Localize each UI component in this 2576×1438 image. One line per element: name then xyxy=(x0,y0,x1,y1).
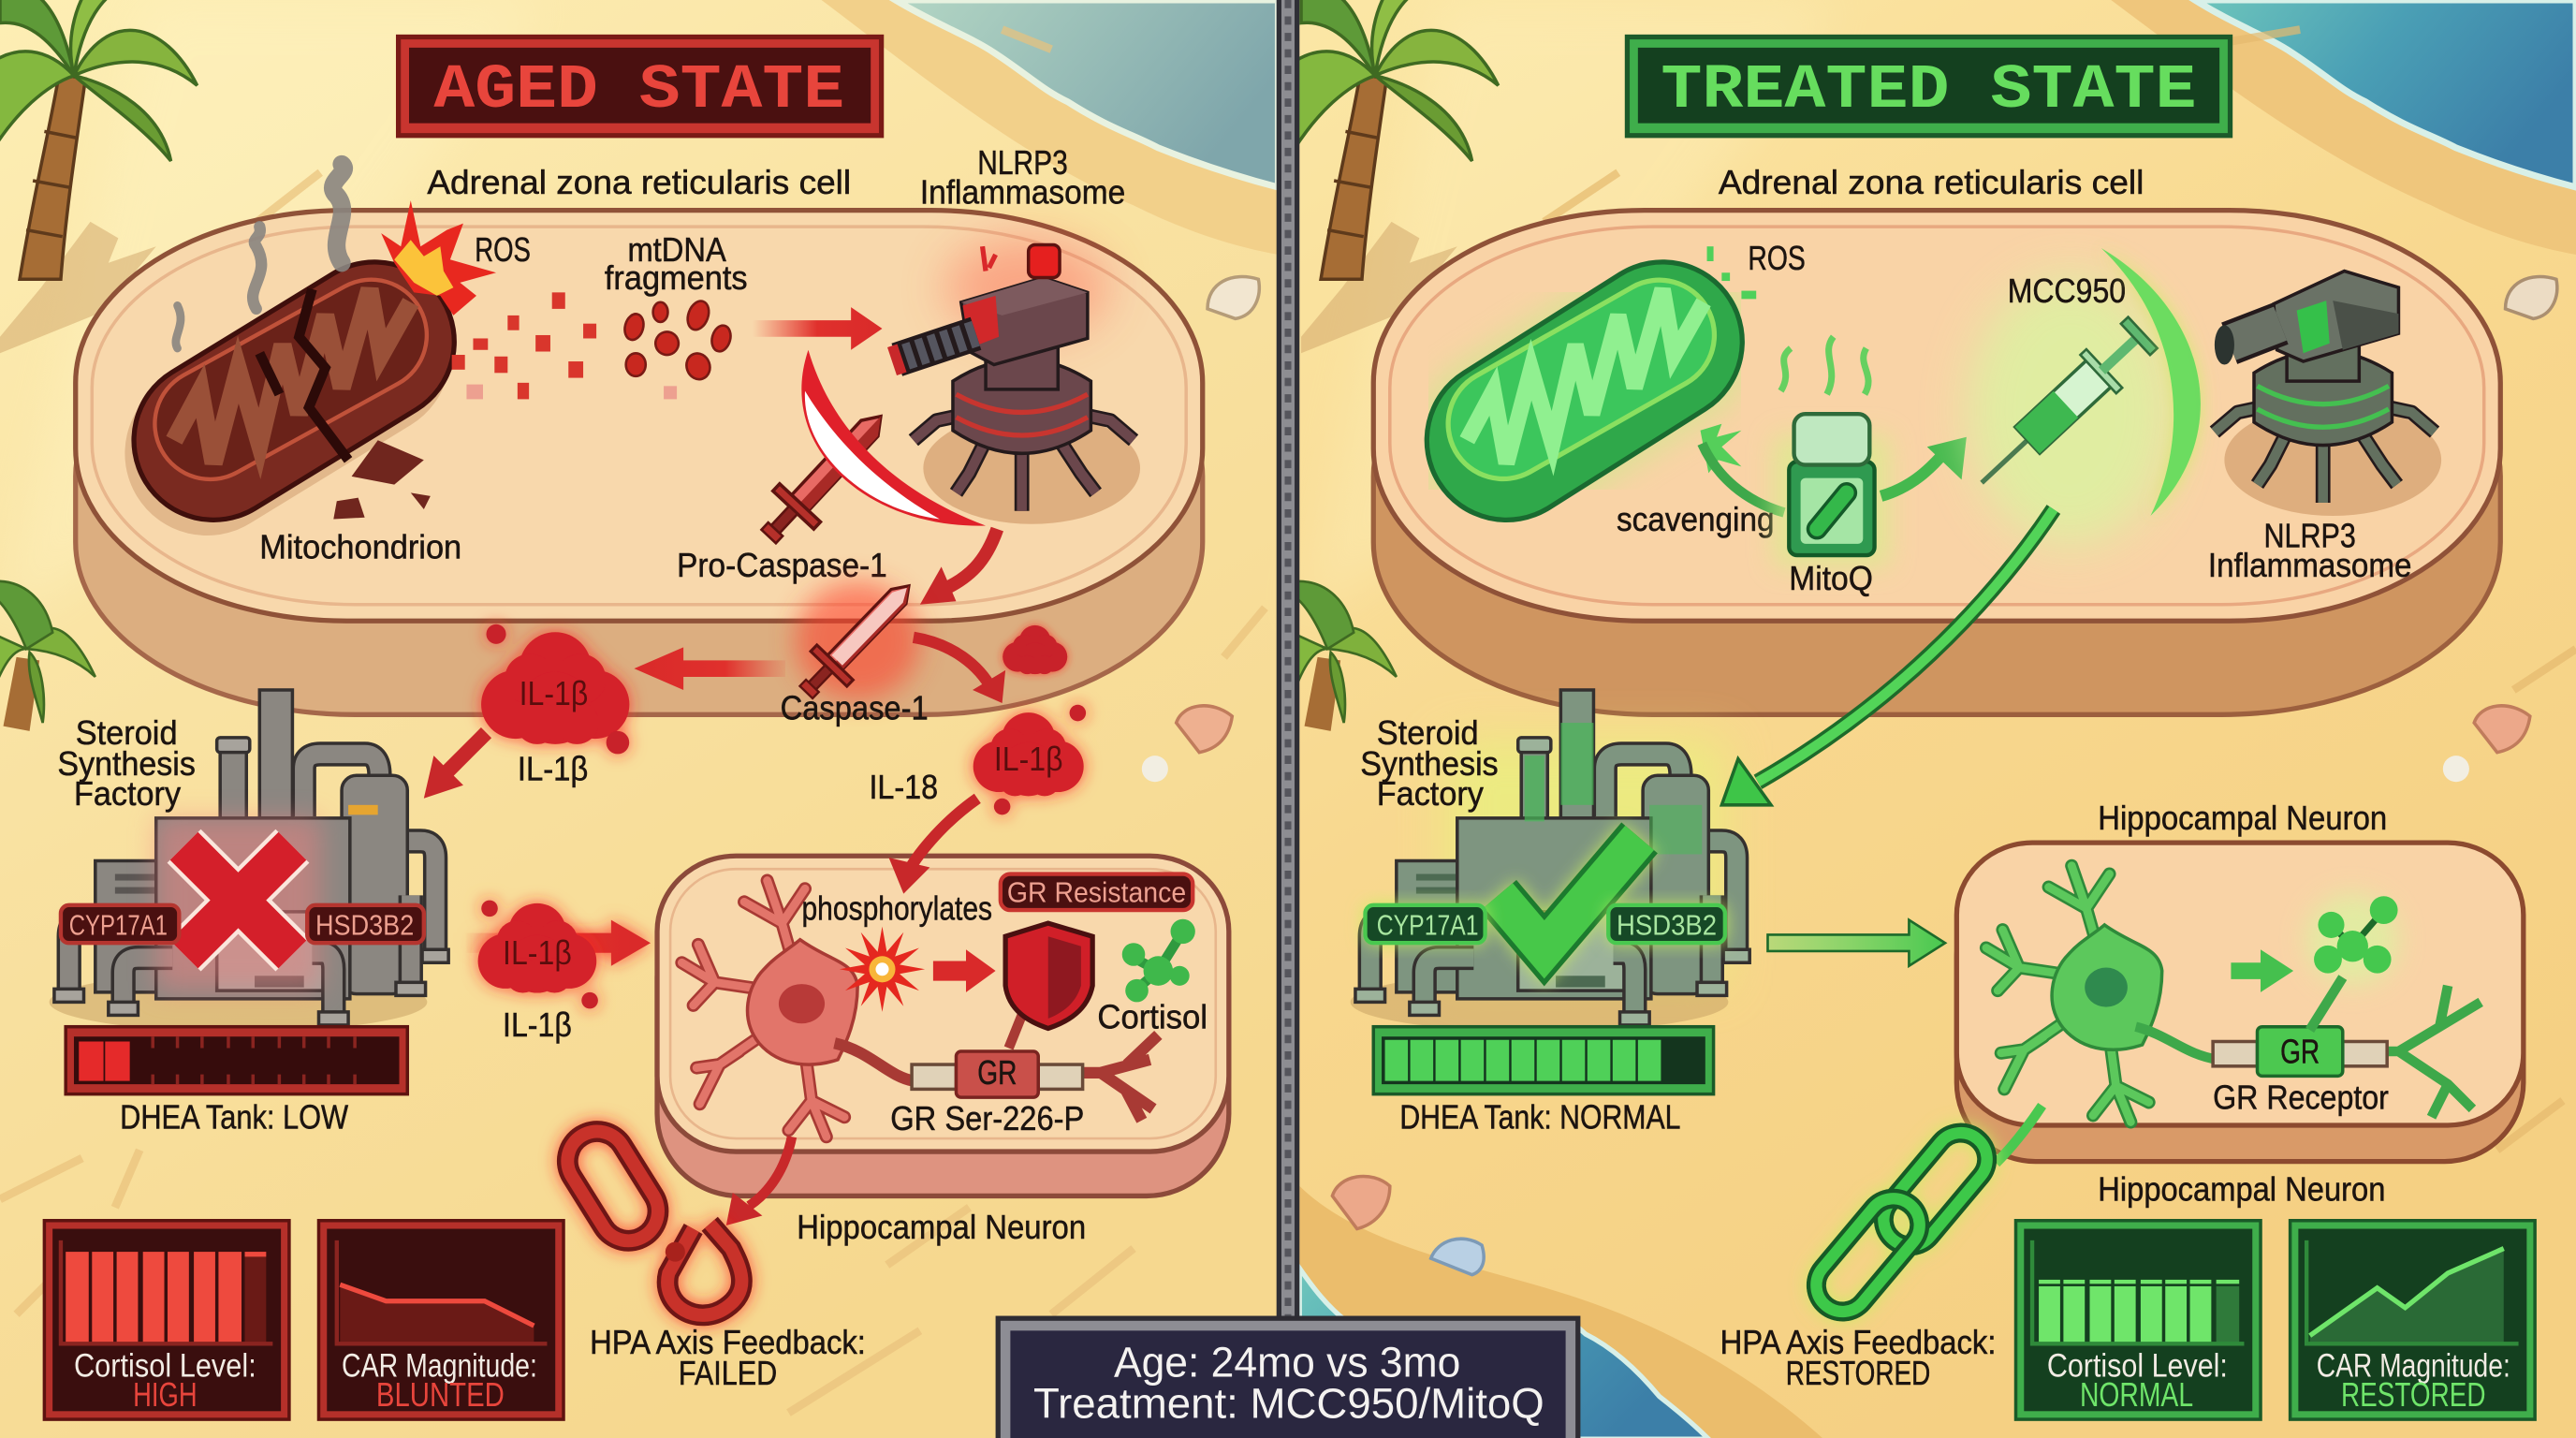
green check xyxy=(1499,838,1640,949)
label: NLRP3 treated xyxy=(2208,516,2411,584)
label: steroid factory aged: Steroid xyxy=(76,713,178,752)
bar chart: cortisol normal xyxy=(2039,1280,2239,1343)
panel: cortisol level high: HIGH xyxy=(133,1375,198,1414)
panel: treated state background xyxy=(1298,0,2576,1438)
healthy mitochondrion xyxy=(1467,289,1704,463)
steroid factory aged xyxy=(50,690,448,1032)
MCC950 syringe xyxy=(1964,314,2160,502)
enzyme tag: HSD3B2 aged: HSD3B2 xyxy=(315,908,414,941)
palm tree: treated lower xyxy=(1292,581,1397,731)
label: hippocampal neuron lower: Hippocampal Neuron xyxy=(2098,1170,2385,1209)
MitoQ vapour xyxy=(1781,337,1868,394)
panel: hippocampal neuron aged xyxy=(657,856,1229,1196)
label: HPA feedback restored: HPA Axis Feedback: xyxy=(1720,1323,1996,1361)
neuron connector and GR aged xyxy=(912,1051,1083,1097)
label: IL-18: IL-18 xyxy=(869,768,938,806)
arrow: IL-1β to neuron xyxy=(465,920,651,966)
label: adrenal cell treated: Adrenal zona reticularis cell xyxy=(1719,163,2144,201)
label: ROS treated: ROS xyxy=(1748,239,1806,277)
label: cortisol: Cortisol xyxy=(1097,997,1208,1035)
label: GR receptor: GR Receptor xyxy=(2213,1078,2389,1116)
nucleus treated xyxy=(2085,968,2128,1007)
cortisol molecule aged xyxy=(1122,919,1195,1002)
cytokine blob: upper IL-1β: IL-1β xyxy=(520,674,588,712)
arrow: IL-1β to factory xyxy=(444,733,487,775)
panel: cortisol level normal: NORMAL xyxy=(2080,1375,2193,1414)
nucleus aged xyxy=(779,984,825,1023)
panel: CAR magnitude restored: CAR Magnitude: xyxy=(2317,1347,2510,1384)
arrow head caspase-1 to IL-18 xyxy=(973,670,1005,703)
arrow: caspase-1 to IL-18 xyxy=(914,638,992,690)
restored chain xyxy=(1806,1123,1998,1322)
arrow: neuron to cortisol treated xyxy=(2231,949,2293,992)
gun barrel xyxy=(897,333,976,360)
turret head xyxy=(961,278,1088,365)
shells: aged xyxy=(1142,277,1259,782)
label: hippocampal neuron top: Hippocampal Neuron xyxy=(2098,799,2387,837)
shore: wet sand right bottom xyxy=(1299,1186,1823,1438)
pro-caspase-1 sword xyxy=(748,397,901,555)
enzyme tag: CYP17A1 aged: CYP17A1 xyxy=(69,908,168,941)
neuron treated xyxy=(1986,866,2162,1122)
shore: wet sand left xyxy=(822,0,1278,255)
label: steroid factory aged xyxy=(57,713,196,813)
panel: treated adrenal cell xyxy=(1373,211,2500,714)
label: IL-1β below blob: IL-1β xyxy=(518,749,588,787)
panel: CAR magnitude restored xyxy=(2289,1219,2537,1421)
small cytokine blob xyxy=(1003,625,1067,674)
decoration: light rays right xyxy=(1299,0,1840,624)
label: NLRP3 aged: Inflammasome xyxy=(920,173,1125,212)
cytokine blob: lower IL-1β: IL-1β xyxy=(503,933,572,972)
cytokine blob: right IL-1β: IL-1β xyxy=(994,740,1063,778)
palm tree: treated top xyxy=(1293,0,1499,353)
red beacon xyxy=(1029,244,1060,278)
sand streaks right xyxy=(1528,30,2576,1150)
label: HPA feedback restored: RESTORED xyxy=(1786,1354,1930,1392)
panel: cortisol level high: Cortisol Level: xyxy=(74,1347,256,1384)
palm tree: aged lower xyxy=(0,581,95,731)
panel: cortisol level high xyxy=(43,1219,291,1421)
label: steroid factory treated: Synthesis xyxy=(1360,744,1499,783)
panel: hippocampal neuron treated xyxy=(1956,843,2524,1162)
label: steroid factory aged: Factory xyxy=(74,774,181,813)
DHEA tank: low xyxy=(66,1027,407,1094)
arrow: mitochondrion to MitoQ xyxy=(1702,444,1784,512)
label: steroid factory treated: Factory xyxy=(1377,774,1484,813)
label: pro-caspase-1: Pro-Caspase-1 xyxy=(677,546,887,584)
legend plaque: age and treatment: Age: 24mo vs 3mo xyxy=(1114,1338,1460,1386)
label: ROS aged: ROS xyxy=(475,230,531,269)
caspase-1 sword with glow xyxy=(788,568,927,710)
palm tree: aged top xyxy=(0,0,198,353)
ocean: right panel bottom xyxy=(1299,1269,1708,1438)
label: NLRP3 treated: NLRP3 xyxy=(2264,516,2356,554)
cortisol molecule treated xyxy=(2306,894,2398,1030)
glow behind NLRP3 turret xyxy=(944,238,1109,337)
panel: cortisol level normal: Cortisol Level: xyxy=(2047,1347,2228,1384)
decoration: light rays xyxy=(0,0,542,624)
label: steroid factory treated xyxy=(1360,713,1499,813)
smoke xyxy=(176,164,344,348)
label: HPA feedback failed xyxy=(590,1323,866,1392)
arrow head to neuron xyxy=(889,858,929,894)
red X xyxy=(184,846,292,954)
arrow: cleavage to caspase-1 xyxy=(940,529,997,592)
neuron connector and GR aged: GR xyxy=(977,1053,1017,1092)
cytokine blob: lower IL-1β xyxy=(478,901,598,1008)
label: mtDNA fragments xyxy=(605,230,748,297)
arrow: IL-18 to neuron xyxy=(909,799,977,871)
inhibition shield arc xyxy=(2101,248,2201,516)
label: mitochondrion: Mitochondrion xyxy=(259,528,461,566)
panel: CAR magnitude blunted: BLUNTED xyxy=(376,1375,505,1414)
panel: CAR magnitude blunted xyxy=(317,1219,565,1421)
axon treated xyxy=(2136,986,2481,1117)
label: steroid factory treated: Steroid xyxy=(1377,713,1479,752)
cleaving slash xyxy=(801,350,986,526)
legend plaque: age and treatment xyxy=(996,1316,1580,1438)
arrow head cleavage xyxy=(920,566,956,605)
arrow head to factory xyxy=(1721,759,1771,805)
connector and GR treated xyxy=(2213,1027,2387,1076)
label: steroid factory aged: Synthesis xyxy=(57,744,196,783)
label: NLRP3 aged xyxy=(920,143,1125,212)
NLRP3 inflammasome turret treated xyxy=(2215,271,2441,516)
arrow: MitoQ to MCC950 xyxy=(1881,450,1947,496)
scattered mtDNA specks xyxy=(452,292,677,399)
label: adrenal cell aged: Adrenal zona reticularis cell xyxy=(427,163,851,201)
panel: aged adrenal cell xyxy=(76,211,1203,714)
mtDNA fragments xyxy=(622,298,733,383)
neuron aged xyxy=(681,881,1158,1137)
line chart: CAR blunted xyxy=(340,1284,534,1343)
label: mtDNA fragments: mtDNA xyxy=(627,230,726,269)
connector and GR treated: GR xyxy=(2280,1032,2320,1070)
title: treated state: TREATED STATE xyxy=(1661,55,2197,126)
barrel xyxy=(2230,324,2280,344)
label: GR Ser-226-P: GR Ser-226-P xyxy=(890,1099,1084,1137)
axon aged xyxy=(835,1034,1158,1121)
label: MCC950: MCC950 xyxy=(2008,271,2126,310)
GR resistance shield xyxy=(1005,923,1092,1049)
burst: phosphorylation xyxy=(840,927,925,1012)
enzyme tag: CYP17A1 treated: CYP17A1 xyxy=(1377,908,1479,941)
muted turret head xyxy=(2274,271,2398,361)
label: NLRP3 aged: NLRP3 xyxy=(977,143,1068,182)
label: hippocampal neuron aged: Hippocampal Neuron xyxy=(797,1208,1086,1246)
label: HPA feedback failed: FAILED xyxy=(679,1354,777,1392)
arrow body treated xyxy=(1758,509,2054,782)
damaged mitochondrion xyxy=(174,289,431,519)
broken chain xyxy=(556,1121,741,1315)
panel: CAR magnitude blunted: CAR Magnitude: xyxy=(342,1347,537,1384)
arrow: MCC950 to factory xyxy=(1758,509,2054,782)
label: mtDNA fragments: fragments xyxy=(605,258,748,297)
panel: aged state background xyxy=(0,0,1278,1438)
label: scavenging: scavenging xyxy=(1617,500,1775,538)
label: DHEA normal: DHEA Tank: NORMAL xyxy=(1399,1098,1680,1136)
tail: neuron to chain xyxy=(1996,1106,2042,1163)
ocean: right panel top xyxy=(2195,0,2576,187)
arrow: neuron to broken chain xyxy=(749,1137,792,1206)
sand streaks left xyxy=(0,30,1265,1413)
ocean: left panel xyxy=(896,0,1278,187)
explosion: ROS burst xyxy=(381,200,496,315)
cytokine blob: upper IL-1β xyxy=(481,624,629,754)
cytokine blob: right IL-1β xyxy=(973,705,1086,814)
factory glow xyxy=(1445,740,1725,986)
NLRP3 inflammasome turret xyxy=(892,244,1140,524)
GR resistance tag: GR Resistance xyxy=(1007,875,1186,908)
arrow head to factory xyxy=(424,756,463,799)
scavenging sparks and ROS specks xyxy=(1701,246,1756,473)
line chart: CAR restored xyxy=(2310,1249,2504,1343)
panel: CAR magnitude restored: RESTORED xyxy=(2341,1375,2485,1414)
panel: cortisol level normal xyxy=(2014,1219,2262,1421)
arrow: phosphorylation to shield xyxy=(933,949,996,992)
label: HPA feedback restored xyxy=(1720,1323,1996,1392)
DHEA tank: normal xyxy=(1373,1027,1714,1094)
label: NLRP3 treated: Inflammasome xyxy=(2208,546,2411,584)
bar chart: cortisol high xyxy=(66,1252,266,1343)
syringe glow xyxy=(1969,276,2172,546)
MitoQ bottle xyxy=(1775,414,1889,566)
legend plaque: age and treatment: Treatment: MCC950/MitoQ xyxy=(1033,1379,1544,1427)
shells: treated xyxy=(1332,277,2557,1275)
label: phosphorylates: phosphorylates xyxy=(801,889,992,928)
shore: wet sand right top xyxy=(2111,0,2576,255)
label: DHEA low: DHEA Tank: LOW xyxy=(120,1098,348,1136)
title: aged state: AGED STATE xyxy=(433,55,844,126)
label: caspase-1: Caspase-1 xyxy=(781,689,929,727)
label: IL-1β lower: IL-1β xyxy=(503,1005,572,1044)
title: treated state xyxy=(1625,35,2232,138)
arrow: factory to neuron xyxy=(1767,920,1945,966)
label: MitoQ: MitoQ xyxy=(1789,559,1873,597)
arrow: mtDNA to NLRP3 xyxy=(753,307,882,350)
enzyme tag: HSD3B2 treated: HSD3B2 xyxy=(1617,908,1717,941)
divider between panels xyxy=(1277,0,1299,1438)
label: HPA feedback failed: HPA Axis Feedback: xyxy=(590,1323,866,1361)
arrow head to MCC950 xyxy=(1927,437,1967,479)
enzyme tag: CYP17A1 treated xyxy=(1365,905,1486,943)
arrow head to chain xyxy=(726,1193,762,1225)
arrow: caspase-1 to IL-1β xyxy=(634,647,785,690)
title: aged state xyxy=(396,35,884,138)
steroid factory treated xyxy=(1351,690,1749,1032)
